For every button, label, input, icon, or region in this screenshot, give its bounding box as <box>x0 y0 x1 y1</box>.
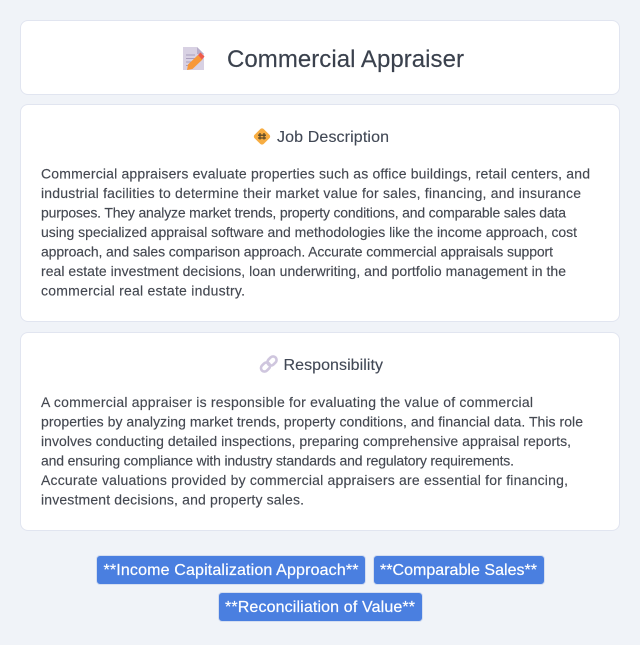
label: comparable sales: **Comparable Sales** <box>380 562 537 579</box>
text block: job description <box>41 166 590 298</box>
text block: job description: commercial real estate industry. <box>41 282 245 298</box>
text block: responsibility: properties by analyzing market trends, property conditions, and financial data. This role <box>41 414 583 430</box>
button: income capitalization approach <box>96 554 366 584</box>
panel: job description <box>20 104 620 322</box>
text block: responsibility: Accurate valuations provided by commercial appraisers are essential for financing, <box>41 472 568 488</box>
button: comparable sales <box>372 554 545 584</box>
icon: document with pencil <box>183 47 204 70</box>
title: Commercial Appraiser <box>227 46 464 73</box>
button: reconciliation of value <box>218 592 423 622</box>
text block: job description: Commercial appraisers evaluate properties such as office buildings, retail centers, and <box>41 166 590 182</box>
label: income capitalization approach: **Income Capitalization Approach** <box>104 562 358 579</box>
text block: responsibility <box>41 394 583 508</box>
text block: responsibility: investment decisions, and property sales. <box>41 492 304 508</box>
text block: responsibility: A commercial appraiser is responsible for evaluating the value of commercial <box>41 394 533 410</box>
text block: job description: purposes. They analyze market trends, property conditions, and comparable sales data <box>41 204 566 220</box>
text block: job description: real estate investment decisions, loan underwriting, and portfolio management in the <box>41 263 566 279</box>
text block: job description: using specialized appraisal software and methodologies like the income approach, cost <box>41 224 577 240</box>
text block: responsibility: and ensuring compliance with industry standards and regulatory requirements. <box>41 452 514 468</box>
icon: orange diamond sign <box>253 127 271 146</box>
text block: job description: approach, and sales comparison approach. Accurate commercial appraisals support <box>41 244 553 260</box>
heading: job description: Job Description <box>277 129 389 146</box>
icon: link <box>259 355 278 373</box>
heading: responsibility: Responsibility <box>284 357 383 374</box>
panel: title <box>20 20 620 94</box>
panel: responsibility <box>20 332 620 531</box>
label: reconciliation of value: **Reconciliation of Value** <box>225 599 415 616</box>
text block: responsibility: involves conducting detailed inspections, preparing comprehensive appraisal reports, <box>41 433 571 449</box>
text block: job description: industrial facilities to determine their market value for sales, financing, and insurance <box>41 185 581 201</box>
